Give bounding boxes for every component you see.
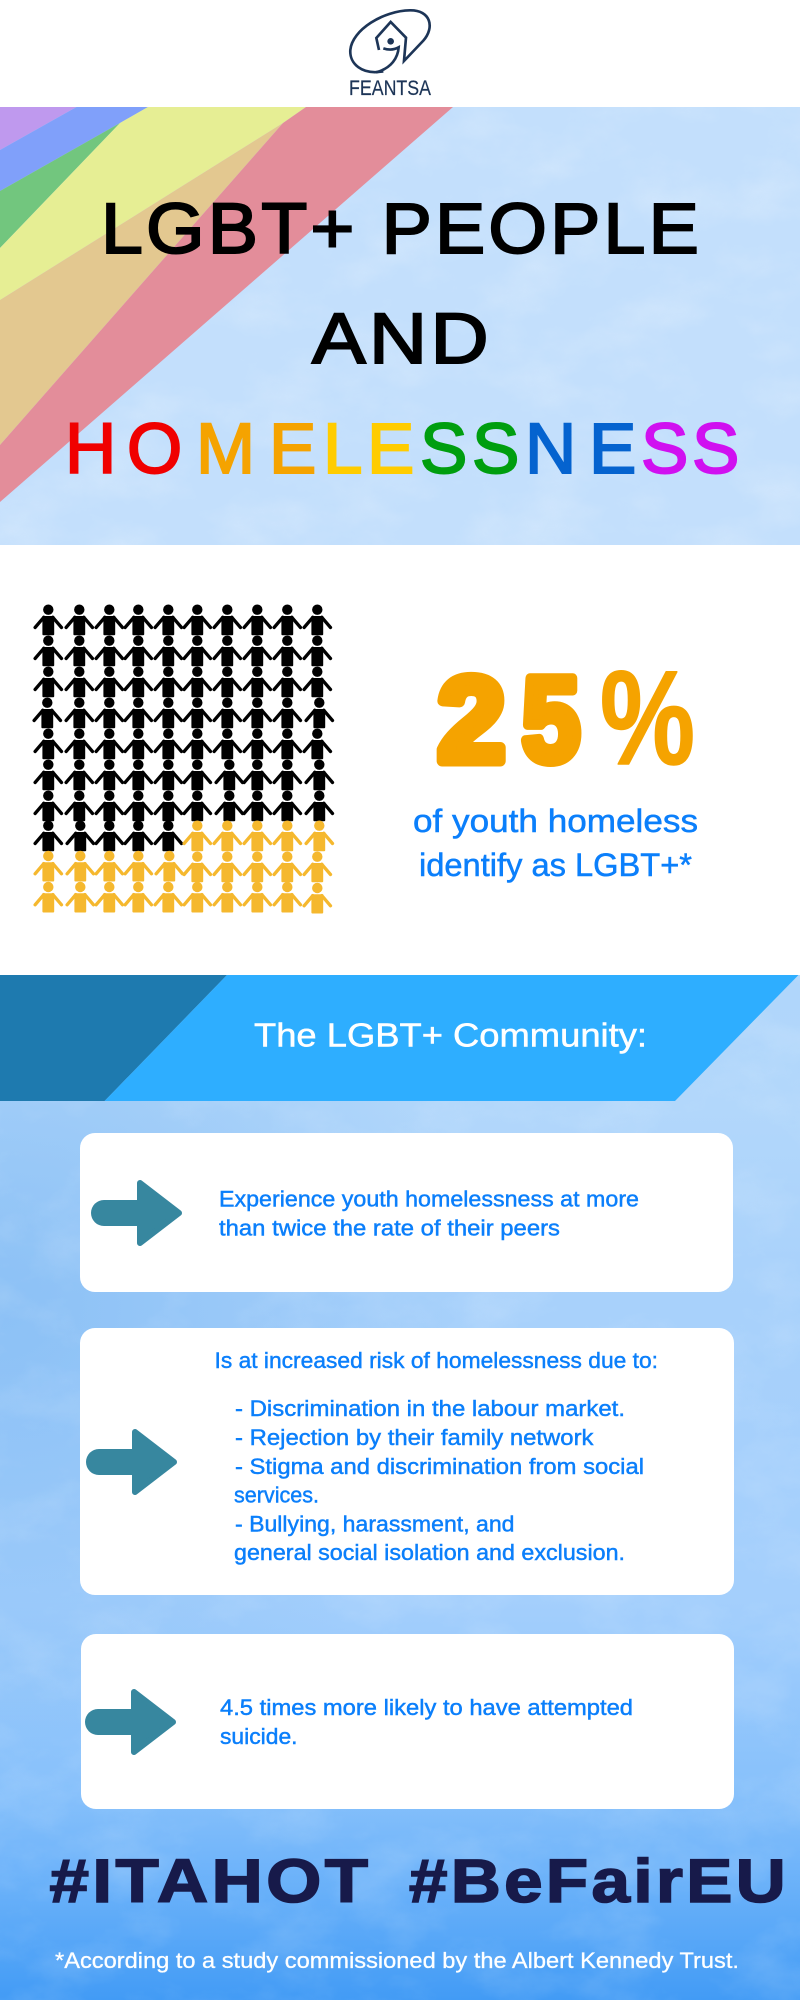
logo: FEANTSA	[349, 10, 431, 100]
pictogram: 100 people, 25 highlighted	[34, 604, 332, 914]
stat caption: identify as LGBT+*	[419, 847, 692, 883]
hashtags: #BeFairEU	[409, 1847, 789, 1915]
header band	[0, 975, 798, 1101]
big number: %	[600, 644, 695, 793]
panel: LGBT+ community	[0, 975, 800, 2000]
logo wordmark: FEANTSA	[349, 77, 431, 100]
hashtags	[50, 1847, 789, 1915]
75 black figures	[34, 604, 332, 851]
hashtags: #ITAHOT	[50, 1847, 372, 1915]
panel: hero	[0, 107, 800, 545]
card 2 text: general social isolation and exclusion.	[234, 1540, 625, 1565]
stat: 25 percent	[413, 644, 698, 883]
card 3 text: suicide.	[220, 1724, 298, 1749]
rainbow diagonal bands	[0, 107, 453, 502]
title: rainbow word: E	[269, 410, 316, 489]
card 2 text: Is at increased risk of homelessness due to:	[214, 1348, 658, 1373]
icon: arrow	[85, 1692, 173, 1752]
card 1 text: than twice the rate of their peers	[219, 1216, 560, 1240]
big number: 2	[438, 653, 505, 787]
card 3 text: 4.5 times more likely to have attempted	[220, 1695, 633, 1720]
title: rainbow word: L	[323, 410, 362, 489]
big number: 5	[522, 653, 580, 787]
title: rainbow word: S	[472, 410, 519, 489]
card 2 text: - Discrimination in the labour market.	[235, 1396, 625, 1421]
title: rainbow word: S	[420, 410, 467, 489]
card 2 text: services.	[234, 1482, 319, 1508]
big number	[438, 644, 695, 793]
card 1 text: Experience youth homelessness at more	[219, 1186, 639, 1212]
title	[65, 190, 739, 489]
title: rainbow word: S	[692, 410, 739, 489]
title: rainbow word: H	[65, 410, 116, 489]
card 2 text	[214, 1348, 658, 1565]
card 1	[80, 1133, 733, 1292]
title: rainbow word: N	[525, 410, 576, 489]
card 2 text: - Stigma and discrimination from social	[235, 1454, 644, 1479]
title: rainbow word: M	[196, 410, 255, 489]
card 2 text: - Bullying, harassment, and	[235, 1512, 514, 1536]
25 yellow figures	[35, 820, 332, 914]
stat caption: of youth homeless	[413, 803, 698, 839]
card 2	[80, 1328, 734, 1595]
title: rainbow word: O	[127, 410, 182, 489]
icon: swoosh and house	[350, 10, 430, 72]
icon: arrow	[86, 1432, 174, 1492]
header text: The LGBT+ Community:	[254, 1016, 647, 1054]
title: AND	[312, 300, 492, 379]
footnote: *According to a study commissioned by the Albert Kennedy Trust.	[55, 1948, 739, 1973]
card 1 text	[219, 1186, 639, 1240]
card 3 text	[220, 1695, 633, 1749]
title: rainbow word: E	[367, 410, 414, 489]
title: rainbow word: E	[589, 410, 636, 489]
card 3	[81, 1634, 734, 1809]
stat caption	[413, 803, 698, 883]
card 2 text: - Rejection by their family network	[235, 1425, 595, 1450]
title: rainbow word: S	[641, 410, 688, 489]
title: LGBT+ PEOPLE	[101, 190, 702, 269]
icon: arrow	[91, 1183, 179, 1243]
